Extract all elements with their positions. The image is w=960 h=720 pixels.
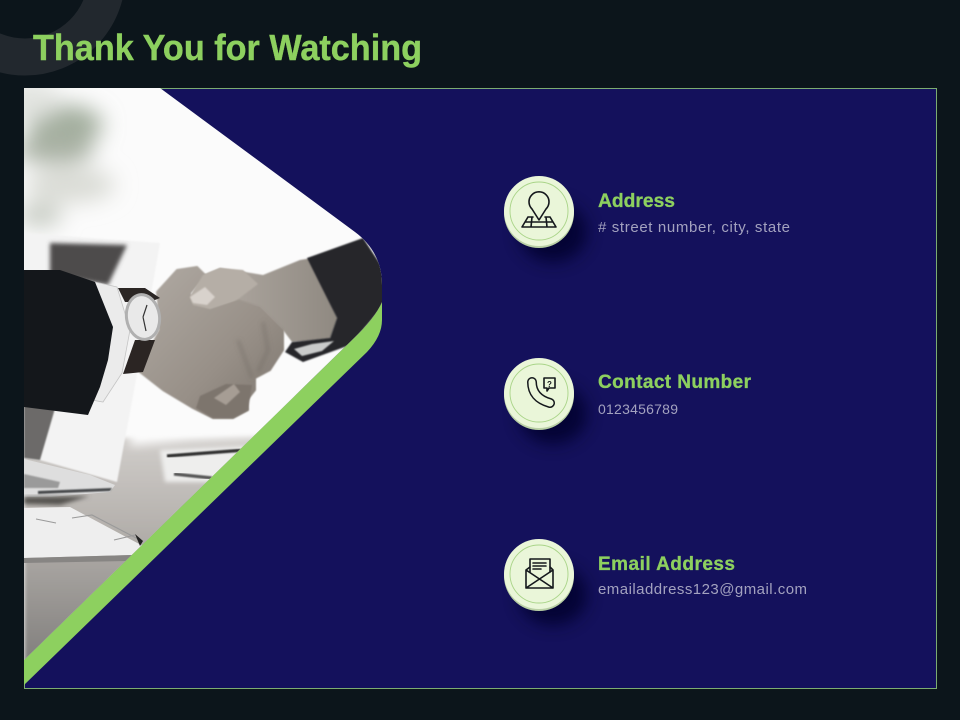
contact: phone — [504, 358, 752, 444]
thumb nail — [190, 287, 215, 305]
text: phone: Contact Number — [598, 372, 752, 393]
icon: phone with question bubble — [504, 358, 587, 444]
thumb — [190, 268, 258, 309]
right sleeve — [285, 238, 384, 362]
green diagonal band — [24, 302, 382, 685]
laptop screen — [50, 243, 127, 285]
lower finger — [196, 384, 252, 418]
bracelet highlight — [294, 341, 334, 356]
laptop lid — [26, 398, 126, 482]
text: address: Address — [598, 191, 675, 212]
text: email: emailaddress123@gmail.com — [598, 581, 807, 598]
icon: phone with question bubble: ? — [547, 380, 552, 389]
watch strap — [118, 288, 160, 302]
left hand — [140, 267, 283, 418]
title: Thank You for Watching — [33, 27, 422, 68]
panel: main navy — [24, 88, 936, 688]
text: email: Email Address — [598, 554, 735, 575]
icon: address pin — [504, 176, 587, 262]
photo: handshake — [0, 80, 384, 670]
text: address — [598, 191, 790, 236]
contact: address — [504, 176, 790, 262]
contact: email — [504, 539, 807, 625]
icon: open envelope — [504, 539, 587, 625]
watch face — [124, 293, 161, 341]
text: email — [598, 554, 807, 598]
text: address: # street number, city, state — [598, 219, 790, 236]
blurred plant — [24, 88, 118, 234]
text: phone: 0123456789 — [598, 401, 678, 417]
left sleeve — [24, 270, 113, 415]
desk — [24, 435, 254, 660]
finger shading — [238, 324, 268, 372]
decorative ring top left — [0, 0, 107, 57]
pens on desk — [160, 446, 250, 482]
paper document — [24, 507, 143, 558]
right arm — [190, 258, 338, 342]
text: phone — [598, 372, 752, 417]
white cuff — [92, 282, 130, 402]
laptop base — [24, 459, 115, 497]
